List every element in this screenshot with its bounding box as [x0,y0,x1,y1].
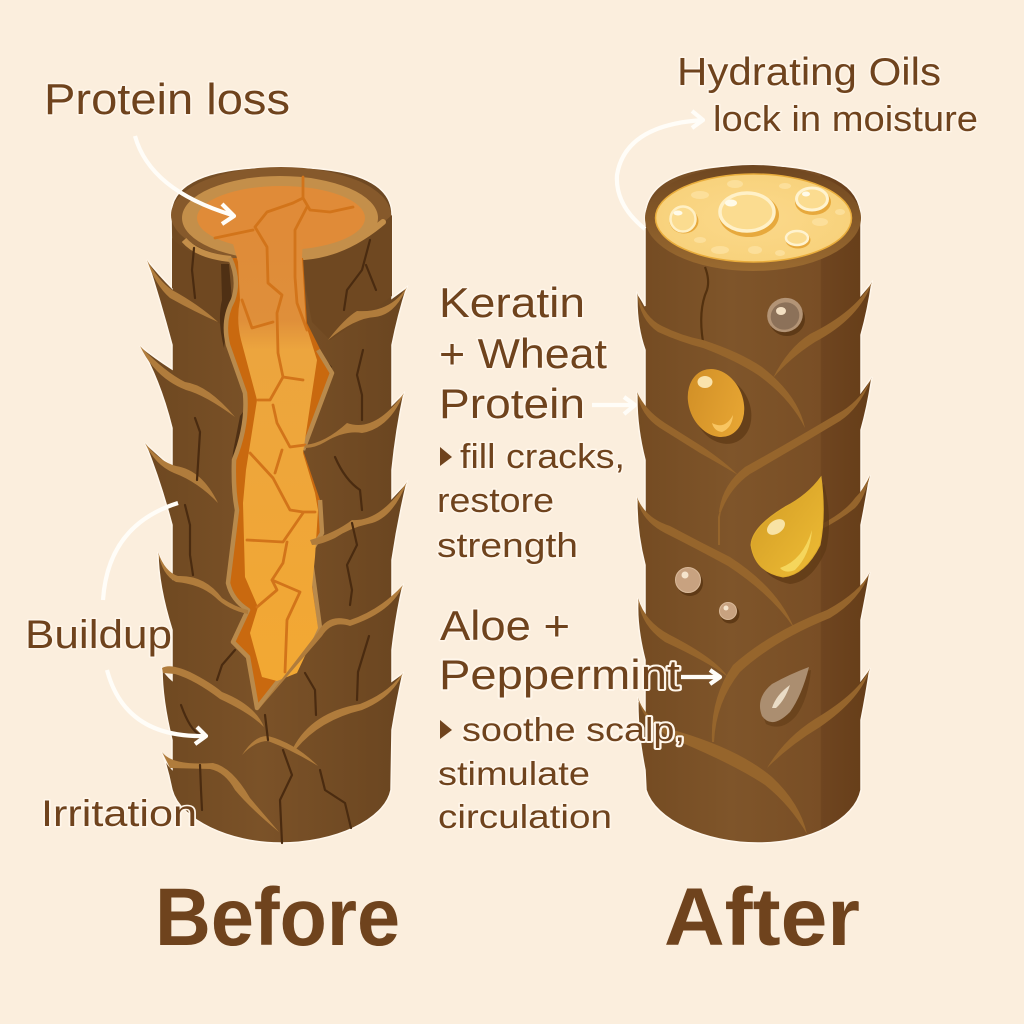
text: keratin benefit: fill cracks, [460,438,625,476]
left body patch [172,238,228,330]
label: hydrating oils: Hydrating Oils [677,51,941,94]
text: aloe benefit: circulation [438,798,612,835]
surface crack [701,267,708,342]
oil-filled cross section [656,174,852,262]
right body patch covering the ring [303,215,392,340]
arrow: keratin to shaft [592,397,635,414]
crevice border [226,258,332,708]
arrow: peppermint to shaft [681,670,720,684]
moisture drop: grey-brown upper [762,292,808,338]
ring lip, left [184,240,231,259]
heading: after: After [664,872,860,963]
label: hydrating oils [677,51,978,139]
top rim [645,165,861,271]
arrow: buildup upward [103,503,178,600]
exposed cortex crevice [215,177,353,708]
bullet [440,720,452,739]
text: keratin benefit: restore [437,482,554,520]
oil texture [691,180,845,256]
label: keratin and wheat protein: Protein [439,380,585,427]
surface cracks [181,240,376,843]
surface scales [140,260,407,832]
water droplet: grey teardrop [760,667,811,727]
text: aloe benefit: soothe scalp, [462,711,685,748]
dark shadow beside the cortex, left [220,264,246,464]
exposed cortex disc [197,186,365,250]
bubble: large centre [719,193,779,237]
dark shadow beside the cortex, right [306,347,332,622]
label: keratin and wheat protein: + Wheat [439,330,607,377]
water droplet: small [720,602,740,624]
heading: before: Before [155,872,400,963]
arrow: hydrating oils [617,111,703,229]
text: keratin benefit [437,438,625,565]
bullet [440,447,452,466]
bubble: lower right [786,231,810,248]
shaft body with smooth scales [637,165,872,843]
label: keratin and wheat protein: Keratin [439,279,585,326]
bubble: upper right [795,188,831,215]
label: buildup: Buildup [25,613,172,657]
ring lip, right [304,222,383,257]
label: irritation: Irritation [41,793,197,834]
bubble: small left [670,206,698,234]
scale lines [637,282,872,834]
illustration: before hair shaft [140,167,407,843]
oil drop: gold teardrop [751,477,829,584]
label: protein loss: Protein loss [44,75,290,124]
label: aloe and peppermint: Aloe + [440,602,570,649]
text: keratin benefit: strength [437,527,578,565]
label: aloe and peppermint: Peppermint [439,651,680,698]
top rim of the cut shaft [171,167,391,263]
oil drop: amber egg [678,360,762,454]
label: keratin and wheat protein [439,279,607,427]
arrow: buildup downward [107,670,206,744]
cortex cells [232,240,318,681]
shaft body with lifted scales [140,167,407,843]
arrow: protein loss to core [135,136,234,224]
cortex cracks [215,177,353,672]
tan cuticle ring [182,176,378,260]
crevice base [226,258,332,708]
water droplet: medium [676,568,703,596]
illustration: after hair shaft [637,165,872,843]
text: aloe benefit: stimulate [438,755,590,792]
text: aloe benefit [438,711,685,835]
label: hydrating oils: lock in moisture [713,98,978,139]
label: aloe and peppermint [439,602,680,698]
